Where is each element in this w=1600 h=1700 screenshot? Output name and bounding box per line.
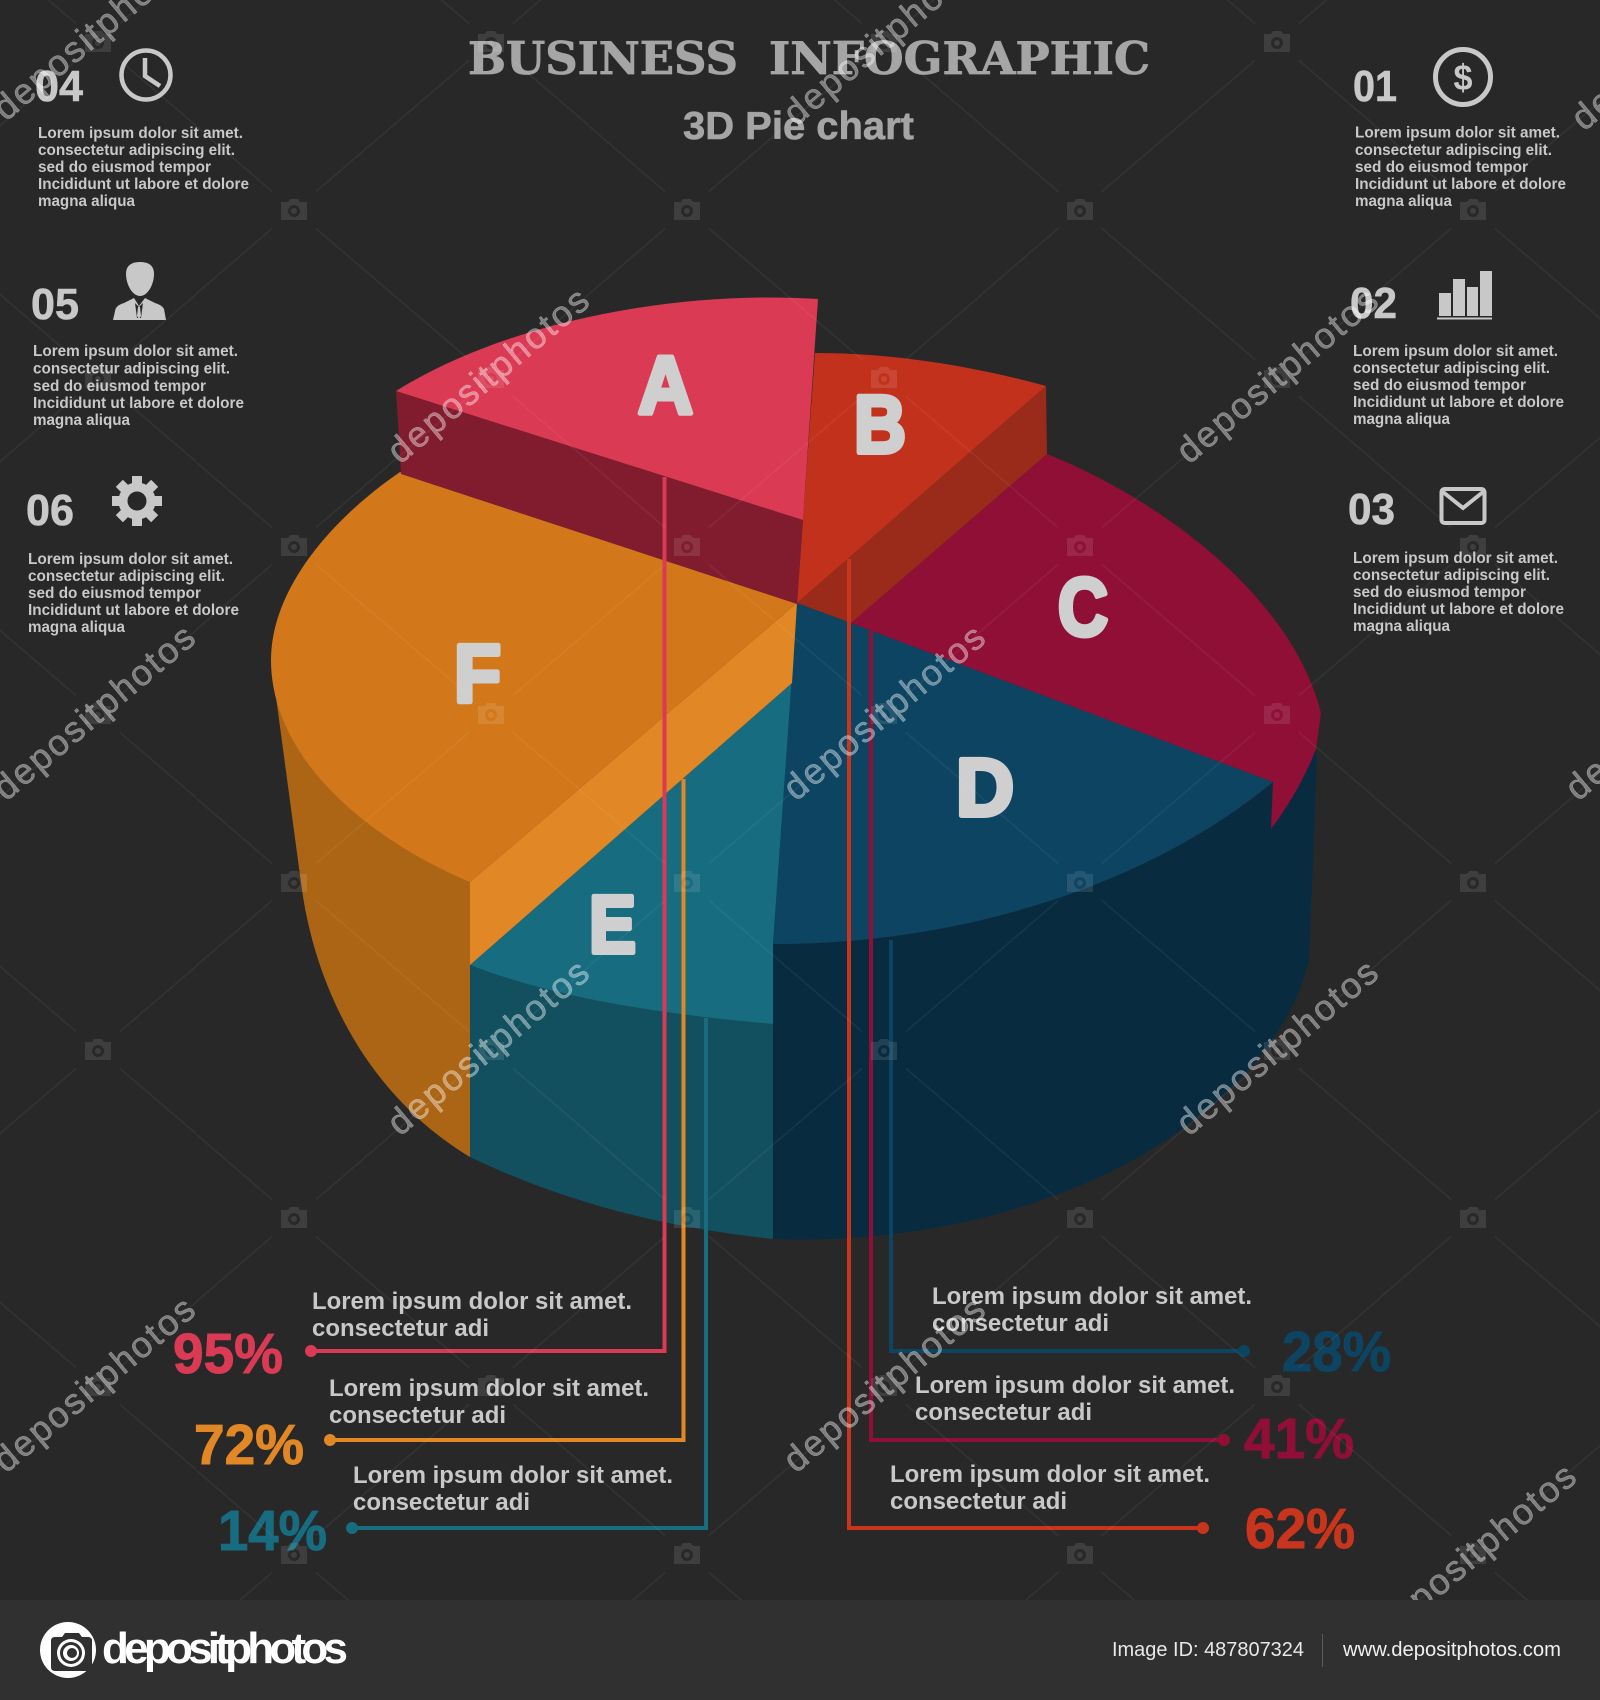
callout: 95%: Lorem ipsum dolor sit amet. xyxy=(312,1288,632,1315)
title: BUSINESS xyxy=(468,32,738,85)
slice E top xyxy=(470,683,792,1024)
icon: dollar: $ xyxy=(1454,57,1472,98)
text block 01: Incididunt ut labore et dolore xyxy=(1355,176,1566,193)
callout: 28%: 28% xyxy=(1282,1320,1391,1384)
panel: 02: 02 xyxy=(1350,279,1397,328)
callout: 14%: consectetur adi xyxy=(353,1489,530,1516)
callout: 62%: Lorem ipsum dolor sit amet. xyxy=(890,1461,1210,1488)
icon: dollar xyxy=(1436,50,1490,104)
text block 05 xyxy=(33,343,244,429)
website url: www.depositphotos.com xyxy=(1342,1639,1561,1661)
slice F side wall xyxy=(271,660,470,1157)
icon: envelope xyxy=(1442,489,1484,523)
text block 06: Incididunt ut labore et dolore xyxy=(28,602,239,619)
panel: 02 xyxy=(1350,271,1564,428)
icon: bar chart xyxy=(1437,271,1492,320)
slice A top xyxy=(396,297,818,520)
text block 01: consectetur adipiscing elit. xyxy=(1355,142,1552,159)
text block 02: consectetur adipiscing elit. xyxy=(1353,360,1550,377)
text block 02: Incididunt ut labore et dolore xyxy=(1353,394,1564,411)
callout: 28%: Lorem ipsum dolor sit amet. xyxy=(932,1283,1252,1310)
panel: 04: 04 xyxy=(35,62,84,111)
slice letters xyxy=(454,340,1108,970)
callout: 41%: Lorem ipsum dolor sit amet. xyxy=(915,1372,1235,1399)
slice E side wall xyxy=(470,965,773,1239)
callout: 95%: consectetur adi xyxy=(312,1315,489,1342)
watermark text: depositphotos xyxy=(775,616,993,808)
leader line D xyxy=(891,940,1248,1355)
slice letters: E xyxy=(589,880,636,970)
panel: 03: 03 xyxy=(1348,485,1395,534)
panel: 04 xyxy=(35,50,249,210)
callout: 14%: Lorem ipsum dolor sit amet. xyxy=(353,1462,673,1489)
text block 06: consectetur adipiscing elit. xyxy=(28,568,225,585)
subtitle: 3D Pie chart xyxy=(683,105,914,148)
callout: 72%: consectetur adi xyxy=(329,1402,506,1429)
text block 05: consectetur adipiscing elit. xyxy=(33,360,230,378)
slice B side wall xyxy=(797,386,1047,623)
text block 05: sed do eiusmod tempor xyxy=(33,378,206,395)
text block 06: Lorem ipsum dolor sit amet. xyxy=(28,551,233,568)
leader line C xyxy=(871,631,1228,1444)
image id: Image ID: 487807324 xyxy=(1112,1639,1304,1661)
slice letters: B xyxy=(854,380,906,470)
panel: 01: 01 xyxy=(1353,62,1397,111)
callout: 72%: 72% xyxy=(194,1413,304,1477)
icon: clock xyxy=(122,50,170,100)
callout: 41%: 41% xyxy=(1244,1407,1354,1471)
text block 05: Lorem ipsum dolor sit amet. xyxy=(33,343,238,360)
callout: 28%: consectetur adi xyxy=(932,1310,1109,1337)
logo wordmark: depositphotos xyxy=(102,1624,348,1673)
text block 06: sed do eiusmod tempor xyxy=(28,585,201,602)
watermark text: depositphotos xyxy=(775,1288,993,1480)
icon: businessman xyxy=(113,262,166,320)
panel: 03 xyxy=(1348,485,1564,635)
callout: 41% xyxy=(915,1372,1354,1471)
text block 03: consectetur adipiscing elit. xyxy=(1353,567,1550,584)
callout: 41%: consectetur adi xyxy=(915,1399,1092,1426)
callout: 95%: 95% xyxy=(173,1322,283,1386)
leader line E xyxy=(348,1018,706,1532)
callout: 14% xyxy=(218,1462,673,1563)
slice F top xyxy=(271,472,797,882)
slice letters: D xyxy=(956,742,1014,834)
text block 01: Lorem ipsum dolor sit amet. xyxy=(1355,124,1560,142)
text block 01 xyxy=(1355,124,1566,210)
icon: depositphotos logo xyxy=(40,1622,96,1678)
slice D top xyxy=(773,603,1273,944)
text block 04 xyxy=(38,125,249,210)
watermark text: depositphotos xyxy=(1168,951,1386,1143)
callout: 14%: 14% xyxy=(218,1499,327,1563)
watermark text: depositphotos xyxy=(1168,279,1386,471)
text block 04: consectetur adipiscing elit. xyxy=(38,142,235,159)
text block 06 xyxy=(28,551,239,636)
text block 04: Lorem ipsum dolor sit amet. xyxy=(38,125,243,142)
panel: 05: 05 xyxy=(31,280,79,329)
text block 02 xyxy=(1353,343,1564,428)
text block 01: magna aliqua xyxy=(1355,193,1452,210)
title xyxy=(468,32,1150,85)
text block 03: sed do eiusmod tempor xyxy=(1353,584,1526,601)
text block 03: magna aliqua xyxy=(1353,618,1450,635)
text block 05: magna aliqua xyxy=(33,412,130,429)
callout: 28% xyxy=(932,1283,1391,1384)
watermark text: depositphotos xyxy=(379,279,597,471)
text block 05: Incididunt ut labore et dolore xyxy=(33,395,244,412)
panel: 01 xyxy=(1353,50,1566,210)
text block 04: Incididunt ut labore et dolore xyxy=(38,176,249,193)
callout: 62% xyxy=(890,1461,1355,1561)
footer bar xyxy=(0,1600,1600,1700)
text block 02: Lorem ipsum dolor sit amet. xyxy=(1353,343,1558,360)
title: INFOGRAPHIC xyxy=(769,32,1150,85)
callout: 62%: consectetur adi xyxy=(890,1488,1067,1515)
watermark text: depositphotos xyxy=(1366,1455,1584,1647)
slice C top xyxy=(851,454,1321,829)
text block 01: sed do eiusmod tempor xyxy=(1355,159,1528,176)
text block 06: magna aliqua xyxy=(28,619,125,636)
slice F inner wall xyxy=(470,603,797,965)
text block 03: Lorem ipsum dolor sit amet. xyxy=(1353,550,1558,567)
text block 02: magna aliqua xyxy=(1353,411,1450,428)
panel: 05 xyxy=(31,262,244,429)
slice A side wall xyxy=(396,391,803,604)
leader line B xyxy=(849,559,1207,1532)
panel: 06 xyxy=(26,476,239,636)
3D pie chart xyxy=(271,297,1321,1240)
slice B top xyxy=(797,353,1046,603)
text block 04: magna aliqua xyxy=(38,193,135,210)
text block 03: Incididunt ut labore et dolore xyxy=(1353,601,1564,618)
icon: gear xyxy=(112,476,162,526)
callout: 62%: 62% xyxy=(1245,1497,1355,1561)
slice letters: A xyxy=(638,340,693,432)
callout: 72% xyxy=(194,1375,649,1477)
callout: 95% xyxy=(173,1288,632,1386)
slice letters: C xyxy=(1058,562,1108,653)
text block 04: sed do eiusmod tempor xyxy=(38,159,211,176)
leader line A xyxy=(307,477,664,1355)
text block 03 xyxy=(1353,550,1564,635)
slice D side wall xyxy=(773,749,1317,1240)
watermark text: depositphotos xyxy=(379,951,597,1143)
text block 02: sed do eiusmod tempor xyxy=(1353,377,1526,394)
panel: 06: 06 xyxy=(26,486,74,535)
callout: 72%: Lorem ipsum dolor sit amet. xyxy=(329,1375,649,1402)
leader line F xyxy=(326,779,684,1444)
slice letters: F xyxy=(454,628,501,720)
